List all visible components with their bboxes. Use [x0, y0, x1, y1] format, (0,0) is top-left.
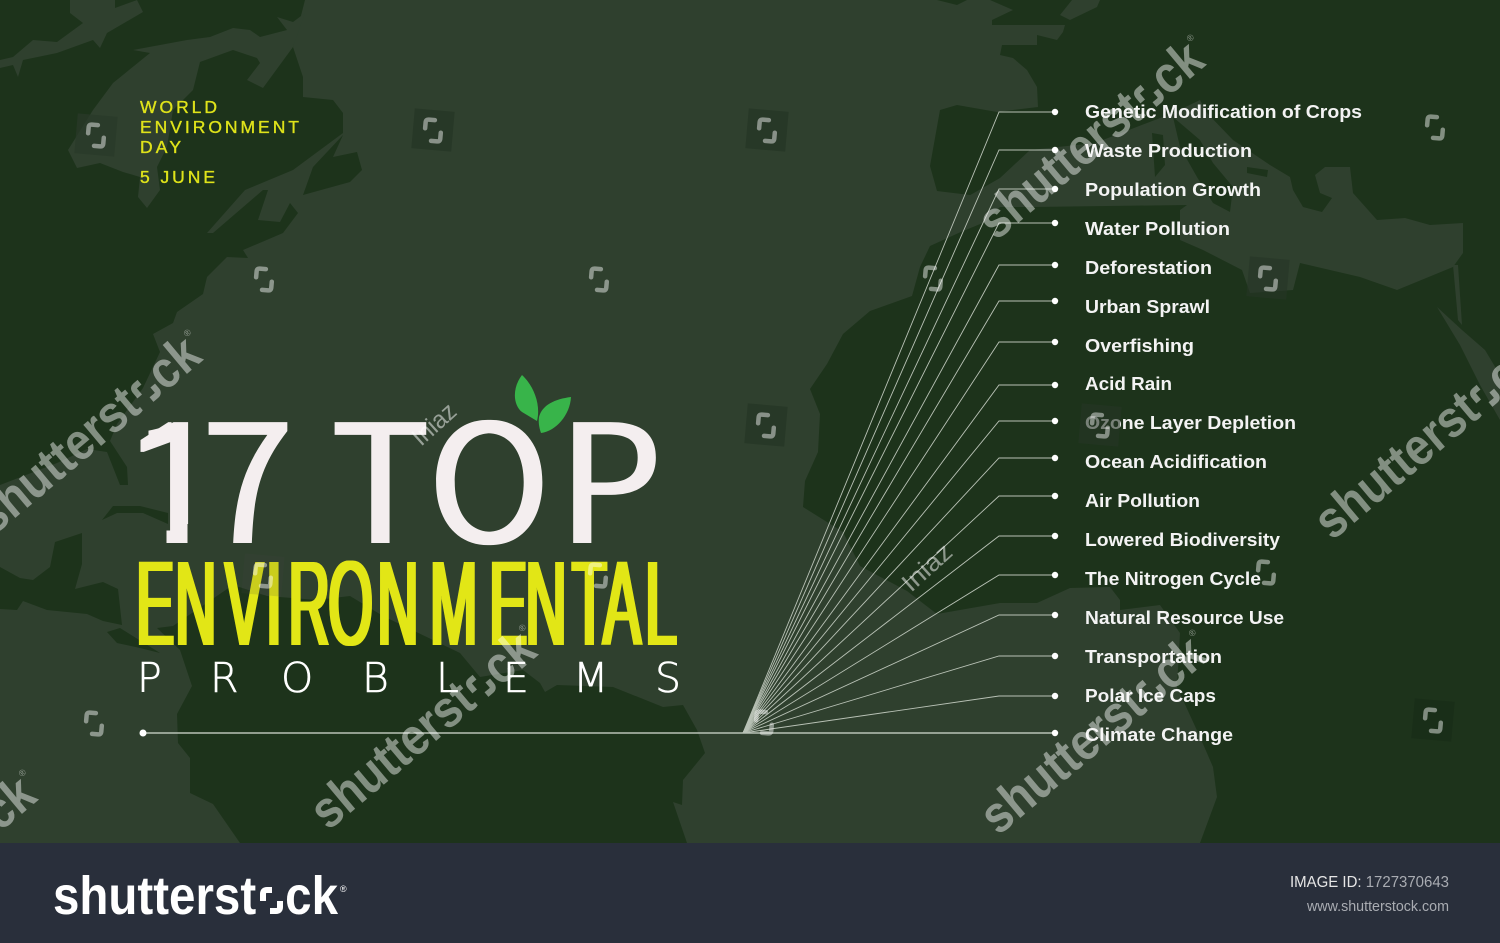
land: South America — [157, 585, 705, 843]
item: Air Pollution: Air Pollution — [1085, 490, 1200, 511]
water: Red Sea — [1437, 307, 1500, 420]
item: Deforestation — [743, 257, 1212, 733]
item: Water Pollution: Water Pollution — [1085, 218, 1230, 239]
item: Ozone Layer Depletion: Ozone Layer Depletion — [1085, 412, 1296, 433]
item: Ocean Acidification: Ocean Acidification — [1085, 451, 1267, 472]
date block: DAY — [140, 137, 181, 157]
footer logo: ® — [340, 884, 347, 894]
item: Climate Change: Climate Change — [1085, 724, 1233, 745]
watermark: shutterstock top right: shutterstock — [967, 29, 1215, 250]
item: Air Pollution — [743, 490, 1200, 733]
land: Cuba — [102, 506, 168, 524]
date block: WORLD — [140, 97, 217, 117]
title — [138, 375, 678, 693]
watermark icon tiles — [74, 108, 1455, 742]
item: Waste Production: Waste Production — [1085, 140, 1252, 161]
footer logo: shutterstock — [53, 866, 339, 926]
land: Central America — [107, 628, 160, 653]
land: Corsica and Sardinia — [1152, 133, 1165, 177]
title line: PROBLEMS: PROBLEMS — [137, 654, 681, 702]
water: Mediterranean Sea — [963, 100, 1463, 293]
item: Acid Rain: Acid Rain — [1085, 373, 1172, 394]
watermark: shutterstock right bottom: shutterstock — [969, 624, 1217, 845]
watermark: shutterstock centre bottom: ® — [517, 622, 528, 634]
image id: IMAGE ID: 1727370643 — [1290, 874, 1449, 891]
item: The Nitrogen Cycle — [743, 568, 1261, 733]
item: Transportation: Transportation — [1085, 646, 1222, 667]
water: Suez — [1453, 265, 1462, 325]
item: Overfishing: Overfishing — [1085, 335, 1194, 356]
item: Genetic Modification of Crops: Genetic Modification of Crops — [1085, 101, 1362, 122]
item: Population Growth — [743, 179, 1261, 733]
land: North America — [0, 0, 343, 485]
item: Polar Ice Caps: Polar Ice Caps — [1085, 685, 1216, 706]
watermark: shutterstock left: ® — [182, 327, 193, 339]
item: Urban Sprawl: Urban Sprawl — [1085, 296, 1210, 317]
land: Newfoundland — [303, 135, 362, 195]
water: North Sea sliver — [1060, 0, 1100, 20]
item: Deforestation: Deforestation — [1085, 257, 1212, 278]
item: The Nitrogen Cycle: The Nitrogen Cycle — [1085, 568, 1261, 589]
footer bar — [0, 843, 1500, 943]
water: northern channels — [0, 0, 143, 77]
title line: 17 TOP — [140, 420, 656, 546]
item: Acid Rain — [743, 373, 1172, 733]
item: Polar Ice Caps — [743, 685, 1216, 733]
watermark: shutterstock right bottom: ® — [1187, 627, 1198, 639]
title line: ENVIRONMENTAL: ENVIRONMENTAL — [136, 536, 677, 672]
item: Urban Sprawl — [743, 296, 1210, 733]
land: Adriatic coast sliver — [1247, 167, 1268, 177]
title line: 17 TOP: TOP — [331, 352, 662, 591]
date block: 5 JUNE — [140, 167, 215, 187]
item: Transportation — [743, 646, 1222, 733]
list of 17 problems with fan connectors — [743, 101, 1362, 745]
item: Ozone Layer Depletion — [743, 412, 1296, 733]
item: Waste Production — [743, 140, 1252, 733]
water: Hudson Bay — [68, 13, 305, 208]
watermark: shutterstock bottom-left fragment: ® — [17, 767, 28, 779]
watermark: contributor name on fan: Iniaz — [896, 538, 958, 597]
item: Population Growth: Population Growth — [1085, 179, 1261, 200]
date block: ENVIRONMENT — [140, 117, 299, 137]
item: Lowered Biodiversity: Lowered Biodiversity — [1085, 529, 1281, 550]
baseline with start dot — [140, 730, 1055, 736]
date block — [140, 97, 299, 187]
item: Water Pollution — [743, 218, 1230, 733]
website url: www.shutterstock.com — [1306, 899, 1449, 915]
item: Genetic Modification of Crops — [743, 101, 1362, 733]
land: Europe, Africa and Asia — [803, 0, 1500, 843]
icon: green leaves — [515, 375, 571, 433]
land: Mexico — [0, 533, 122, 625]
watermark: contributor name on title: Iniaz — [406, 397, 462, 451]
item: Natural Resource Use: Natural Resource Use — [1085, 607, 1284, 628]
item: Lowered Biodiversity — [743, 529, 1281, 733]
land: small northern island — [937, 0, 967, 5]
item: Overfishing — [743, 335, 1194, 733]
title line: 17 TOP: 17 — [130, 352, 294, 591]
item: Ocean Acidification — [743, 451, 1267, 733]
watermark: shutterstock centre bottom: shutterstock — [299, 619, 547, 840]
watermark bracket icons — [85, 116, 1444, 735]
watermark: shutterstock top right: ® — [1185, 32, 1196, 44]
land: Italy — [1173, 117, 1233, 212]
item: Natural Resource Use — [743, 607, 1284, 733]
